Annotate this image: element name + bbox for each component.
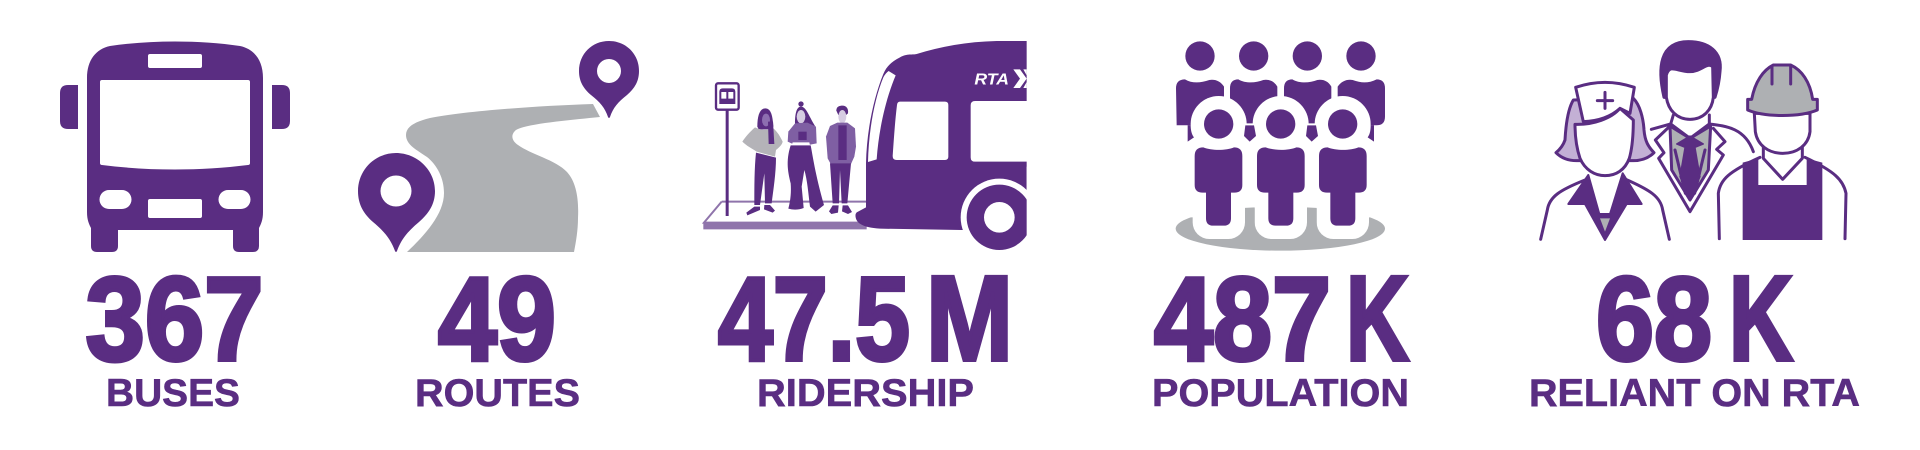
back row people xyxy=(1176,41,1385,125)
number unit: M: M xyxy=(926,250,1013,386)
icon: small map pin xyxy=(579,41,639,118)
panel: buses xyxy=(60,42,290,415)
number: 367: 367 xyxy=(86,253,264,386)
nurse xyxy=(1541,82,1669,240)
number: 487: 487 xyxy=(1154,253,1331,386)
bus logo: chevron xyxy=(1013,69,1027,88)
number: 47.5: 47.5 xyxy=(718,253,910,386)
rider 2 xyxy=(788,101,824,212)
back row leg fragments xyxy=(1188,125,1374,142)
gaps in the shadow xyxy=(1245,208,1317,228)
bus stop sign xyxy=(716,83,739,216)
number: 68: 68 xyxy=(1596,253,1712,386)
number unit: K: K xyxy=(1729,250,1793,386)
illustration: bus stop and riders xyxy=(703,41,1060,256)
panel: ridership xyxy=(703,41,1060,415)
bus side view xyxy=(855,41,1060,256)
white halo around front row xyxy=(1175,96,1387,239)
panel: routes xyxy=(358,41,639,415)
label: population: POPULATION xyxy=(1152,372,1409,415)
bus logo: RTA: RTA xyxy=(974,72,1009,89)
icon: left mirror xyxy=(60,85,78,129)
icon: three workers xyxy=(1541,42,1846,240)
icon: large map pin xyxy=(358,153,435,252)
label: reliant on RTA: RELIANT ON RTA xyxy=(1529,372,1860,415)
icon: road xyxy=(406,104,600,252)
panel: reliant on RTA xyxy=(1529,42,1860,415)
riders xyxy=(742,101,856,215)
icon: bus front xyxy=(60,42,290,252)
icon: crowd xyxy=(1175,41,1387,251)
number: 49: 49 xyxy=(438,253,556,386)
label: routes: ROUTES xyxy=(415,372,580,415)
rider 1 xyxy=(742,108,783,215)
label: ridership: RIDERSHIP xyxy=(757,372,974,415)
panel: population xyxy=(1152,41,1409,415)
label: buses: BUSES xyxy=(106,372,240,415)
doctor xyxy=(1651,42,1753,212)
platform xyxy=(703,202,870,229)
construction worker xyxy=(1718,65,1846,240)
number unit: K: K xyxy=(1346,250,1409,386)
icon: right mirror xyxy=(272,85,290,129)
shadow ellipse xyxy=(1176,207,1385,251)
rider 3 xyxy=(826,106,856,214)
front row people xyxy=(1195,109,1367,226)
